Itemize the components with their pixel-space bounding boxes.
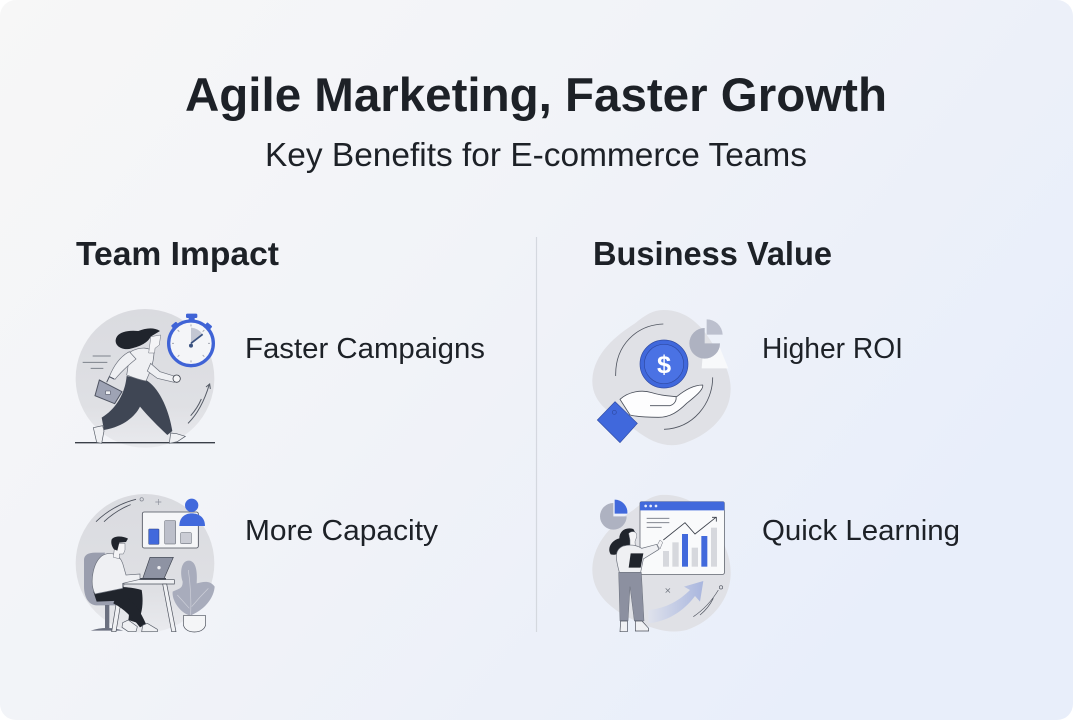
briefcase xyxy=(95,380,122,404)
chair xyxy=(84,553,118,605)
trousers xyxy=(102,376,172,435)
person icon xyxy=(179,499,205,526)
back hair xyxy=(116,328,160,349)
head xyxy=(149,335,161,353)
legs xyxy=(93,587,143,623)
head xyxy=(113,543,125,559)
laptop xyxy=(143,557,173,579)
shoes xyxy=(93,426,104,443)
arms xyxy=(109,352,136,379)
heading: Business Value: Business Value xyxy=(593,235,832,272)
pie chart xyxy=(600,500,627,530)
subtitle: Key Benefits for E-commerce Teams xyxy=(265,136,807,173)
pie chart and stand xyxy=(689,319,728,368)
growth arrow xyxy=(648,581,703,623)
desk xyxy=(114,580,174,584)
label: Quick Learning: Quick Learning xyxy=(762,515,960,547)
title: Agile Marketing, Faster Growth xyxy=(185,68,887,121)
stopwatch xyxy=(169,314,213,366)
icon: man working at laptop with chart xyxy=(76,494,215,633)
coin: $ xyxy=(657,351,671,379)
plant xyxy=(173,561,215,615)
shoes xyxy=(122,620,137,632)
icon: hand holding dollar coin xyxy=(592,310,731,445)
browser window xyxy=(640,502,724,574)
chart card xyxy=(142,512,198,548)
cuff xyxy=(597,402,637,443)
woman xyxy=(609,528,663,632)
torso xyxy=(92,553,140,594)
heading: Team Impact: Team Impact xyxy=(76,235,279,272)
icon: woman presenting chart xyxy=(592,495,731,632)
torso xyxy=(127,348,154,381)
label: Faster Campaigns: Faster Campaigns xyxy=(245,333,485,365)
label: More Capacity: More Capacity xyxy=(245,515,439,547)
icon: running woman with stopwatch xyxy=(75,309,215,448)
label: Higher ROI: Higher ROI xyxy=(762,333,903,365)
hand xyxy=(620,385,703,417)
